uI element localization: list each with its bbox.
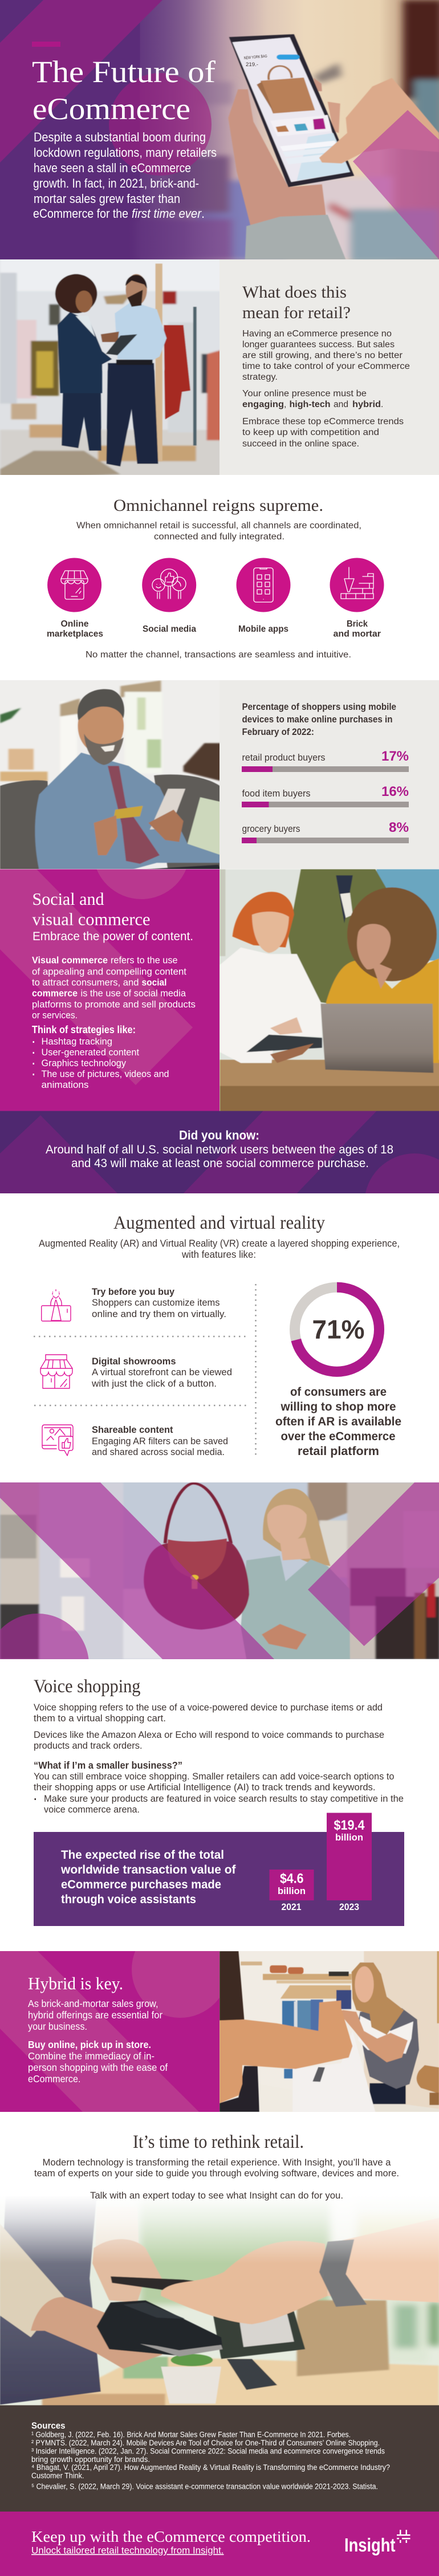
body text	[242, 329, 410, 449]
body text	[32, 954, 196, 1021]
watch	[319, 2240, 367, 2307]
body text: to keep up with competition and	[242, 428, 379, 437]
heading	[32, 889, 151, 929]
body text: engaging	[242, 400, 284, 409]
smaller business text: You can still embrace voice shopping. Smaller retailers can add voice-search options to	[34, 1771, 395, 1782]
white fade	[0, 2195, 439, 2264]
channel labels: Brick	[347, 619, 368, 629]
diagonal band	[0, 0, 162, 162]
body text: .	[381, 400, 383, 409]
heading: Percentage of shoppers using mobile	[242, 701, 396, 712]
strategies list: animations	[41, 1079, 89, 1090]
source list: bring growth opportunity for brands.	[31, 2455, 150, 2464]
phone labels: 219.-	[246, 62, 258, 67]
bar 2023: 2023	[339, 1901, 359, 1912]
body text: Voice shopping refers to the use of a voice-powered device to purchase items or add	[34, 1702, 383, 1713]
panel: footer call to action	[0, 2512, 439, 2576]
fact text: and 43 will make at least one social commerce purchase.	[71, 1157, 369, 1170]
heading: devices to make online purchases in	[242, 714, 392, 725]
heading: Social and	[32, 889, 104, 909]
left hair	[220, 1951, 244, 2021]
bar 2021: $4.6	[280, 1871, 303, 1886]
intro text: .	[201, 206, 205, 221]
photo: contactless payment at terminal	[0, 2195, 439, 2407]
fact text	[46, 1143, 393, 1170]
heading	[242, 701, 396, 737]
text: digital showrooms	[91, 1356, 232, 1389]
panel: what does this mean for retail	[0, 257, 439, 480]
tablet	[106, 334, 137, 355]
phone	[150, 789, 185, 830]
magenta circle	[0, 1614, 89, 1716]
heading: visual commerce	[32, 909, 151, 929]
source list: ⁵ Chevalier, S. (2022, March 29). Voice assistant e-commerce transaction value worldwide 2021-2023. Statista.	[31, 2482, 378, 2490]
text: try before you buy: Shoppers can customize items	[92, 1297, 220, 1308]
smaller business text: voice commerce arena.	[44, 1804, 140, 1815]
donut caption: often if AR is available	[275, 1415, 401, 1428]
footer link: Unlock tailored retail technology from Insight.	[31, 2545, 223, 2555]
footer heading: Keep up with the eCommerce competition.	[31, 2528, 311, 2545]
panel: voice shopping	[34, 1676, 404, 1926]
hair	[352, 1963, 404, 2035]
right woman	[347, 887, 437, 981]
body text: Talk with an expert today to see what Insight can do for you.	[90, 2190, 343, 2201]
body text	[34, 2157, 399, 2201]
callout text	[60, 1848, 236, 1906]
intro text: Augmented Reality (AR) and Virtual Reality (VR) create a layered shopping experience,	[39, 1237, 400, 1249]
body text	[34, 1702, 384, 1751]
panel: augmented and virtual reality	[34, 1213, 401, 1458]
hero panel	[0, 0, 439, 262]
donut caption: retail platform	[298, 1445, 379, 1458]
strategies list	[32, 1024, 169, 1090]
bar 2021: 2021	[282, 1901, 301, 1912]
chart: grocery buyers: grocery buyers	[242, 823, 300, 834]
source list: ³ Insider Intelligence. (2022, Jan. 27). Social Commerce 2022: Social media and ecommerce convergence trends	[31, 2447, 385, 2455]
head	[78, 706, 124, 748]
heading: What does this	[242, 283, 347, 302]
phone labels	[244, 55, 267, 66]
title: eCommerce	[32, 92, 190, 126]
heading: Augmented and virtual reality	[113, 1213, 325, 1233]
chart: food item buyers: 16%	[381, 784, 409, 799]
body text: are still growing, and there’s no better	[242, 351, 403, 360]
fact text: Around half of all U.S. social network users between the ages of 18	[46, 1143, 393, 1156]
phone labels: NEW YORK BAG	[244, 54, 267, 60]
man	[107, 363, 158, 466]
phone	[229, 34, 354, 187]
body text: to attract consumers, and	[32, 977, 139, 988]
source list: ¹ Goldberg, J. (2022, Feb. 16). Brick And Mortar Sales Grew Faster Than E-Commerce In 2021. Forbes.	[31, 2430, 351, 2439]
closing line: No matter the channel, transactions are seamless and intuitive.	[86, 650, 351, 660]
heading: It’s time to rethink retail.	[133, 2132, 304, 2152]
donut caption: willing to shop more	[281, 1400, 396, 1413]
chart: food item buyers: food item buyers	[242, 788, 310, 799]
text: try before you buy	[92, 1286, 226, 1319]
laptop	[320, 1003, 433, 1073]
body text: Visual commerce	[32, 954, 108, 966]
terminal	[96, 2300, 222, 2356]
channel labels	[47, 619, 381, 639]
donut caption: over the eCommerce	[281, 1430, 396, 1443]
body text: longer guarantees success. But sales	[242, 340, 395, 350]
body text: Modern technology is transforming the retail experience. With Insight, you’ll have a	[42, 2157, 391, 2168]
body text: hybrid	[352, 400, 381, 409]
icon: try before you buy	[42, 1290, 71, 1321]
body text: products and track orders.	[34, 1740, 143, 1751]
sofa	[0, 780, 50, 871]
bar 2023	[327, 1813, 372, 1912]
body text: Having an eCommerce presence no	[242, 329, 392, 339]
body text: strategy.	[242, 372, 278, 382]
accent bar	[32, 42, 60, 47]
far hand	[92, 2239, 162, 2302]
chart: retail product buyers: 17%	[381, 749, 409, 764]
donut chart: 71%: 71%	[312, 1315, 365, 1344]
intro text: lockdown regulations, many retailers	[34, 145, 217, 160]
source list: Customer Think.	[31, 2471, 84, 2480]
bar 2021: billion	[278, 1886, 306, 1896]
tablet	[246, 1035, 322, 1052]
shelves	[263, 1974, 352, 1980]
bar 2021	[269, 1870, 314, 1912]
body text: of appealing and compelling content	[32, 966, 186, 977]
body text: ,	[284, 400, 286, 409]
smaller business text: Make sure your products are featured in voice search results to stay competitive in the	[44, 1793, 404, 1804]
subheading: Embrace the power of content.	[32, 930, 193, 943]
customer forearm	[328, 2218, 439, 2302]
body text: Buy online, pick up in store.	[28, 2039, 151, 2050]
intro text	[39, 1237, 400, 1260]
pillow	[187, 797, 220, 855]
body text: eCommerce.	[28, 2073, 81, 2085]
chart: grocery buyers	[242, 820, 409, 843]
woman	[263, 1489, 330, 1566]
monitor	[213, 2307, 305, 2359]
smaller business text	[34, 1760, 404, 1815]
body text: time to take control of your eCommerce	[242, 361, 410, 371]
intro text: with features like:	[181, 1249, 256, 1260]
panel: social and visual commerce	[0, 869, 439, 1111]
holding hand	[31, 2297, 162, 2369]
intro text: connected and fully integrated.	[154, 532, 284, 542]
sleeve	[245, 215, 346, 259]
icon: social media	[142, 558, 196, 612]
smaller business text: their shopping apps or use Artificial Intelligence (AI) to track trends and keywords.	[34, 1782, 375, 1793]
text: try before you buy: Try before you buy	[92, 1286, 175, 1297]
strategies list: Think of strategies like:	[32, 1024, 136, 1035]
body text: person shopping with the ease of	[28, 2062, 168, 2073]
body text	[28, 1998, 168, 2085]
body text: Embrace these top eCommerce trends	[242, 417, 404, 426]
callout text: through voice assistants	[61, 1892, 196, 1906]
chart: retail product buyers: retail product buyers	[242, 752, 325, 763]
channel labels: Social media	[143, 624, 196, 634]
channel labels: Online	[60, 619, 89, 629]
panel: omnichannel	[47, 496, 384, 660]
pink triangle overlay	[353, 110, 439, 259]
jeans	[282, 2001, 295, 2032]
callout text: The expected rise of the total	[61, 1848, 224, 1862]
intro text: eCommerce for the	[33, 206, 128, 221]
photo: woman with virtual handbag	[0, 1482, 439, 1659]
strategies list: Hashtag tracking	[41, 1036, 112, 1047]
callout: transaction value chart	[34, 1813, 404, 1926]
chart: grocery buyers: 8%	[389, 820, 409, 835]
intro text: have seen a stall in eCommerce	[34, 161, 191, 175]
intro text: Despite a substantial boom during	[34, 130, 206, 144]
callout text: eCommerce purchases made	[61, 1878, 221, 1891]
heading: Did you know:	[179, 1128, 259, 1143]
donut caption: of consumers are	[290, 1385, 387, 1399]
logo: Insight: Insight	[344, 2534, 396, 2555]
photo: customer and shop assistant	[220, 1951, 439, 2112]
apron	[0, 2196, 101, 2404]
title: The Future of	[32, 55, 216, 89]
heading: Voice shopping	[34, 1676, 140, 1697]
arm	[338, 2010, 408, 2062]
yellow top	[326, 958, 439, 1063]
text: shareable content: Engaging AR filters can be saved	[92, 1436, 228, 1447]
strategies list: Graphics technology	[41, 1058, 126, 1068]
body text: hybrid offerings are essential for	[28, 2009, 162, 2021]
body text: Devices like the Amazon Alexa or Echo will respond to voice commands to purchase	[34, 1729, 384, 1740]
left woman	[233, 892, 294, 948]
chair	[417, 2065, 439, 2094]
right hand	[319, 78, 439, 164]
panel: hybrid is key	[0, 1921, 439, 2112]
intro text: When omnichannel retail is successful, all channels are coordinated,	[76, 521, 361, 530]
body text: your business.	[28, 2021, 87, 2032]
panel: it's time to rethink retail	[0, 2132, 439, 2407]
callout text: worldwide transaction value of	[60, 1863, 236, 1876]
channel labels: marketplaces	[47, 629, 103, 639]
bag	[165, 1484, 231, 1543]
strategies list: The use of pictures, videos and	[41, 1068, 169, 1079]
text: digital showrooms: A virtual storefront can be viewed	[92, 1367, 232, 1378]
icon: digital showrooms	[40, 1355, 72, 1388]
heading	[242, 283, 351, 322]
sources heading: Sources	[31, 2421, 66, 2431]
far wrist cuff	[95, 2207, 139, 2264]
customer arm	[220, 2001, 352, 2103]
panel: did you know	[0, 1111, 439, 1193]
phone	[111, 2276, 243, 2298]
heading: mean for retail?	[242, 303, 351, 322]
body text: high-tech	[290, 400, 331, 409]
woman	[62, 392, 101, 451]
title	[32, 60, 216, 120]
magenta overlay left	[0, 1482, 274, 1659]
left hand	[228, 90, 326, 226]
icon: brick and mortar	[330, 558, 384, 612]
icon: mobile apps	[236, 558, 291, 612]
body text: platforms to promote and sell products	[32, 999, 196, 1010]
text: shareable content: Shareable content	[92, 1424, 173, 1435]
body text: Combine the immediacy of in-	[28, 2050, 155, 2062]
text: shareable content: and shared across social media.	[92, 1447, 225, 1457]
body text: As brick-and-mortar sales grow,	[28, 1998, 158, 2009]
body text: team of experts on your side to guide you through evolving software, devices and more.	[34, 2168, 399, 2179]
hands	[94, 815, 117, 855]
body text: and	[334, 400, 348, 409]
body text: Your online presence must be	[242, 389, 367, 399]
body text: succeed in the online space.	[242, 439, 359, 449]
hero photo: shopper using phone	[140, 0, 439, 259]
source list: ² PYMNTS. (2022, March 24). Mobile Devices Are Tool of Choice for One-Third of Consumers’ Online Shopping.	[31, 2439, 380, 2447]
photo: store associates with tablet	[0, 257, 221, 480]
text: digital showrooms: with just the click of a button.	[91, 1378, 217, 1389]
counter	[259, 2084, 292, 2112]
body text: or services.	[32, 1010, 78, 1021]
donut caption	[275, 1385, 401, 1458]
panel: mobile shoppers	[0, 680, 439, 871]
white shirt	[220, 948, 322, 1063]
sleeve	[0, 2224, 64, 2337]
source list	[31, 2430, 390, 2490]
source list: ⁴ Bhagat, V. (2021, April 27). How Augmented Reality & Virtual Reality is Transforming the eCommerce Industry?	[31, 2463, 390, 2472]
vest and skirt	[369, 2083, 406, 2104]
shirt	[35, 753, 221, 871]
strategies list: User-generated content	[41, 1047, 139, 1058]
magenta overlay right	[308, 1482, 439, 1646]
intro text	[33, 130, 217, 221]
channel labels: and mortar	[333, 629, 381, 639]
heading: Hybrid is key.	[28, 1973, 123, 1993]
icon: shareable content	[42, 1425, 73, 1456]
body text: is the use of social media	[81, 988, 186, 999]
bar 2023: billion	[335, 1832, 363, 1843]
donut chart: 71%	[295, 1287, 379, 1372]
smaller business text: “What if I’m a smaller business?”	[34, 1760, 182, 1771]
body text: commerce	[32, 988, 78, 999]
customer hand	[161, 2241, 328, 2324]
photo: two women with tablet and laptop	[220, 869, 439, 1112]
shopping bag	[292, 2031, 375, 2112]
chart: food item buyers	[242, 784, 409, 807]
channel labels: Mobile apps	[238, 624, 288, 634]
bar 2023: $19.4	[334, 1818, 365, 1833]
intro text: first time ever	[132, 206, 202, 221]
text: shareable content	[92, 1424, 228, 1457]
body text: refers to the use	[111, 954, 178, 966]
plant pot	[161, 2367, 221, 2404]
text: digital showrooms: Digital showrooms	[92, 1356, 176, 1367]
photo: man paying with phone on sofa	[0, 680, 221, 871]
table	[220, 1060, 439, 1112]
heading: February of 2022:	[242, 726, 314, 737]
text: try before you buy: online and try them on virtually.	[92, 1309, 226, 1319]
intro text: growth. In fact, in 2021, brick-and-	[33, 176, 199, 190]
body text: social	[141, 977, 166, 988]
intro text	[76, 521, 361, 542]
customer top	[220, 2066, 259, 2112]
card	[113, 806, 143, 819]
chart: retail product buyers	[242, 749, 409, 772]
panel: sources	[0, 2405, 439, 2512]
body text: them to a virtual shopping cart.	[34, 1713, 166, 1724]
icon: online marketplaces	[47, 558, 101, 612]
translucent circle	[109, 73, 212, 176]
heading: Omnichannel reigns supreme.	[113, 496, 323, 515]
intro text: mortar sales grew faster than	[34, 192, 180, 206]
